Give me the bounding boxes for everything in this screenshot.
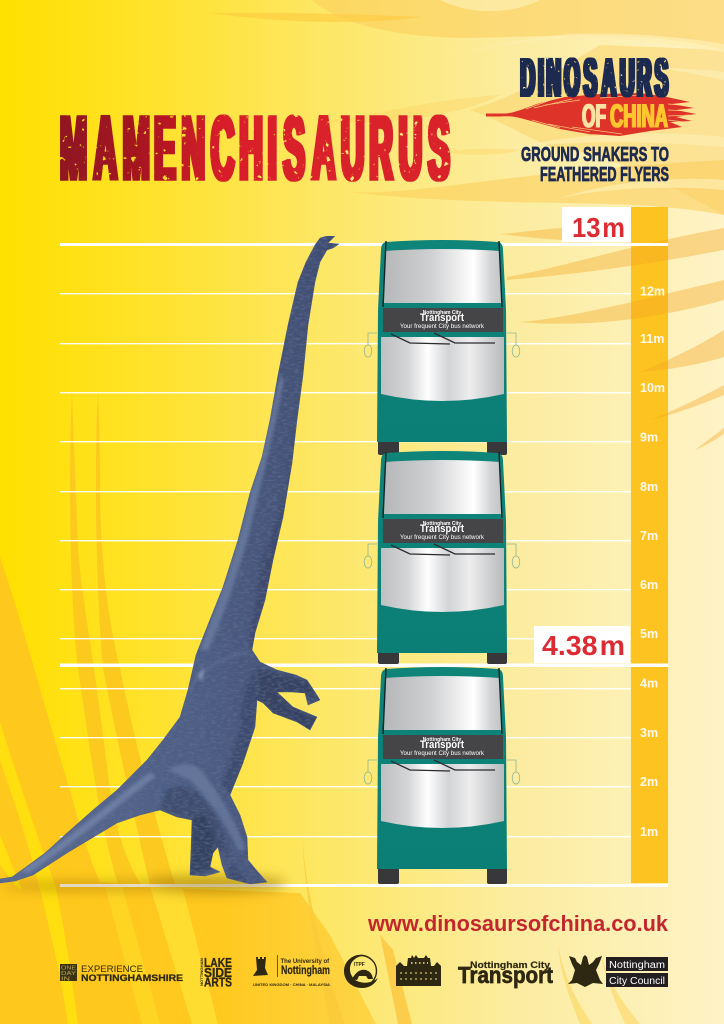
right-side thin leaves xyxy=(302,837,345,1024)
logo: experience nottinghamshire: DAY xyxy=(61,971,76,977)
logo: lakeside arts: ARTS xyxy=(204,976,232,990)
destination band: Nottingham City xyxy=(423,737,462,743)
ruler tick labels: 5m xyxy=(640,627,658,641)
logo: experience nottinghamshire: IN xyxy=(61,976,70,982)
wipers xyxy=(391,760,495,771)
logo: lakeside arts: LAKE xyxy=(204,956,232,970)
logo: university of nottingham: Nottingham xyxy=(281,965,330,977)
pillars xyxy=(383,241,502,307)
dinosaur shading xyxy=(20,375,318,884)
destination band xyxy=(383,519,503,543)
dinosaur shadow xyxy=(0,875,287,893)
logo: university of nottingham xyxy=(253,955,330,987)
bus body xyxy=(377,451,507,653)
ruler tick labels: 9m xyxy=(640,430,658,444)
destination band: Nottingham City xyxy=(423,521,462,527)
mirrors xyxy=(364,760,520,784)
feather barbs xyxy=(526,95,692,134)
ruler tick labels: 4m xyxy=(640,676,658,690)
ruler tick labels xyxy=(640,284,665,839)
destination band: Your frequent City bus network xyxy=(400,751,485,757)
ruler tick labels: 6m xyxy=(640,578,658,592)
wipers xyxy=(391,544,495,555)
wheels xyxy=(378,867,399,884)
logo: experience nottinghamshire: ONE xyxy=(61,966,76,972)
ruler tick labels: 12m xyxy=(640,284,665,298)
logo: dinosaur circle emblem xyxy=(344,955,378,988)
destination band: Your frequent City bus network xyxy=(400,535,485,541)
background palm leaves: upper right xyxy=(208,0,724,215)
pillars xyxy=(383,452,502,518)
bus body xyxy=(377,667,507,869)
narrow orange leaves xyxy=(70,392,145,890)
logo: nottingham city council xyxy=(568,955,668,987)
windscreen xyxy=(381,764,504,828)
bus 3 (bottom) xyxy=(364,667,520,884)
title: MAMENCHISAURUS xyxy=(60,99,450,199)
destination band xyxy=(383,308,503,332)
logo: nottingham city council: Nottingham xyxy=(609,960,665,971)
mirrors xyxy=(364,544,520,568)
yellow streaks in the floor xyxy=(0,722,78,1024)
ruler tick labels: 11m xyxy=(640,332,664,346)
ruler tick labels: 2m xyxy=(640,775,658,789)
upper window xyxy=(384,676,502,730)
destination band: Nottingham City xyxy=(423,310,462,316)
destination band: Your frequent City bus network xyxy=(400,324,485,330)
crest xyxy=(568,955,603,987)
wipers xyxy=(391,333,495,344)
height ruler bar xyxy=(631,207,668,883)
logo: experience nottinghamshire xyxy=(60,964,183,984)
wheels xyxy=(378,440,399,455)
label: 13 m xyxy=(562,207,631,243)
upper window xyxy=(384,460,502,514)
icon: red feather xyxy=(486,93,696,136)
mirrors xyxy=(364,333,520,357)
main lines: 13m, 4.38m and ground xyxy=(60,243,668,887)
logo: experience nottinghamshire: EXPERIENCE xyxy=(81,964,143,975)
logo: university of nottingham: UNITED KINGDOM · CHINA · MALAYSIA xyxy=(253,982,330,987)
logo: university of nottingham: The University of xyxy=(280,959,330,965)
ruler tick labels: 10m xyxy=(640,381,665,395)
windscreen xyxy=(381,337,504,401)
background palm leaves: across the ruler xyxy=(500,228,724,450)
bus body xyxy=(377,240,507,442)
council name boxes xyxy=(606,957,668,971)
logo: of china xyxy=(582,98,668,134)
logo: dinosaur circle emblem: ITPF xyxy=(354,962,365,968)
logo: of china: CHINA xyxy=(610,98,668,134)
logo tagline xyxy=(521,143,669,186)
logo: lakeside arts xyxy=(199,956,232,990)
windscreen xyxy=(381,548,504,612)
logo: castle xyxy=(396,955,441,986)
background palm leaves: lower left xyxy=(0,392,640,1024)
upper window xyxy=(384,249,502,303)
logo: nottingham city transport: Transport xyxy=(458,962,553,988)
large orange leaf and floor xyxy=(0,557,376,1024)
logo: nottingham city transport: Nottingham City xyxy=(470,960,550,970)
exhibition logo xyxy=(486,47,696,186)
label: 4.38 m: 4.38m xyxy=(542,630,625,661)
logo: lakeside arts: SIDE xyxy=(204,966,232,980)
destination band: Transport xyxy=(420,739,464,751)
logo: of china: OF xyxy=(582,98,606,134)
ruler tick labels: 1m xyxy=(640,825,658,839)
destination band: Transport xyxy=(420,312,464,324)
bus 1 (top) xyxy=(364,240,520,455)
scale lines xyxy=(60,293,631,837)
bus 2 (middle) xyxy=(364,451,520,664)
logo: lakeside arts: NOTTINGHAM xyxy=(199,957,204,986)
logo heading: DINOSAURS xyxy=(521,47,668,108)
ruler tick labels: 7m xyxy=(640,529,658,543)
ruler tick labels: 3m xyxy=(640,726,658,740)
wheels xyxy=(378,651,399,664)
destination band: Transport xyxy=(420,523,464,535)
logo: nottingham city council: City Council xyxy=(609,976,665,987)
destination band xyxy=(383,735,503,759)
pillars xyxy=(383,668,502,734)
ruler tick labels: 8m xyxy=(640,480,658,494)
website url: www.dinosaursofchina.co.uk xyxy=(367,911,669,936)
label: 13 m: 13m xyxy=(572,212,625,243)
logo: experience nottinghamshire: NOTTINGHAMSHIRE xyxy=(81,973,183,984)
dinosaur: mamenchisaurus xyxy=(0,236,339,884)
